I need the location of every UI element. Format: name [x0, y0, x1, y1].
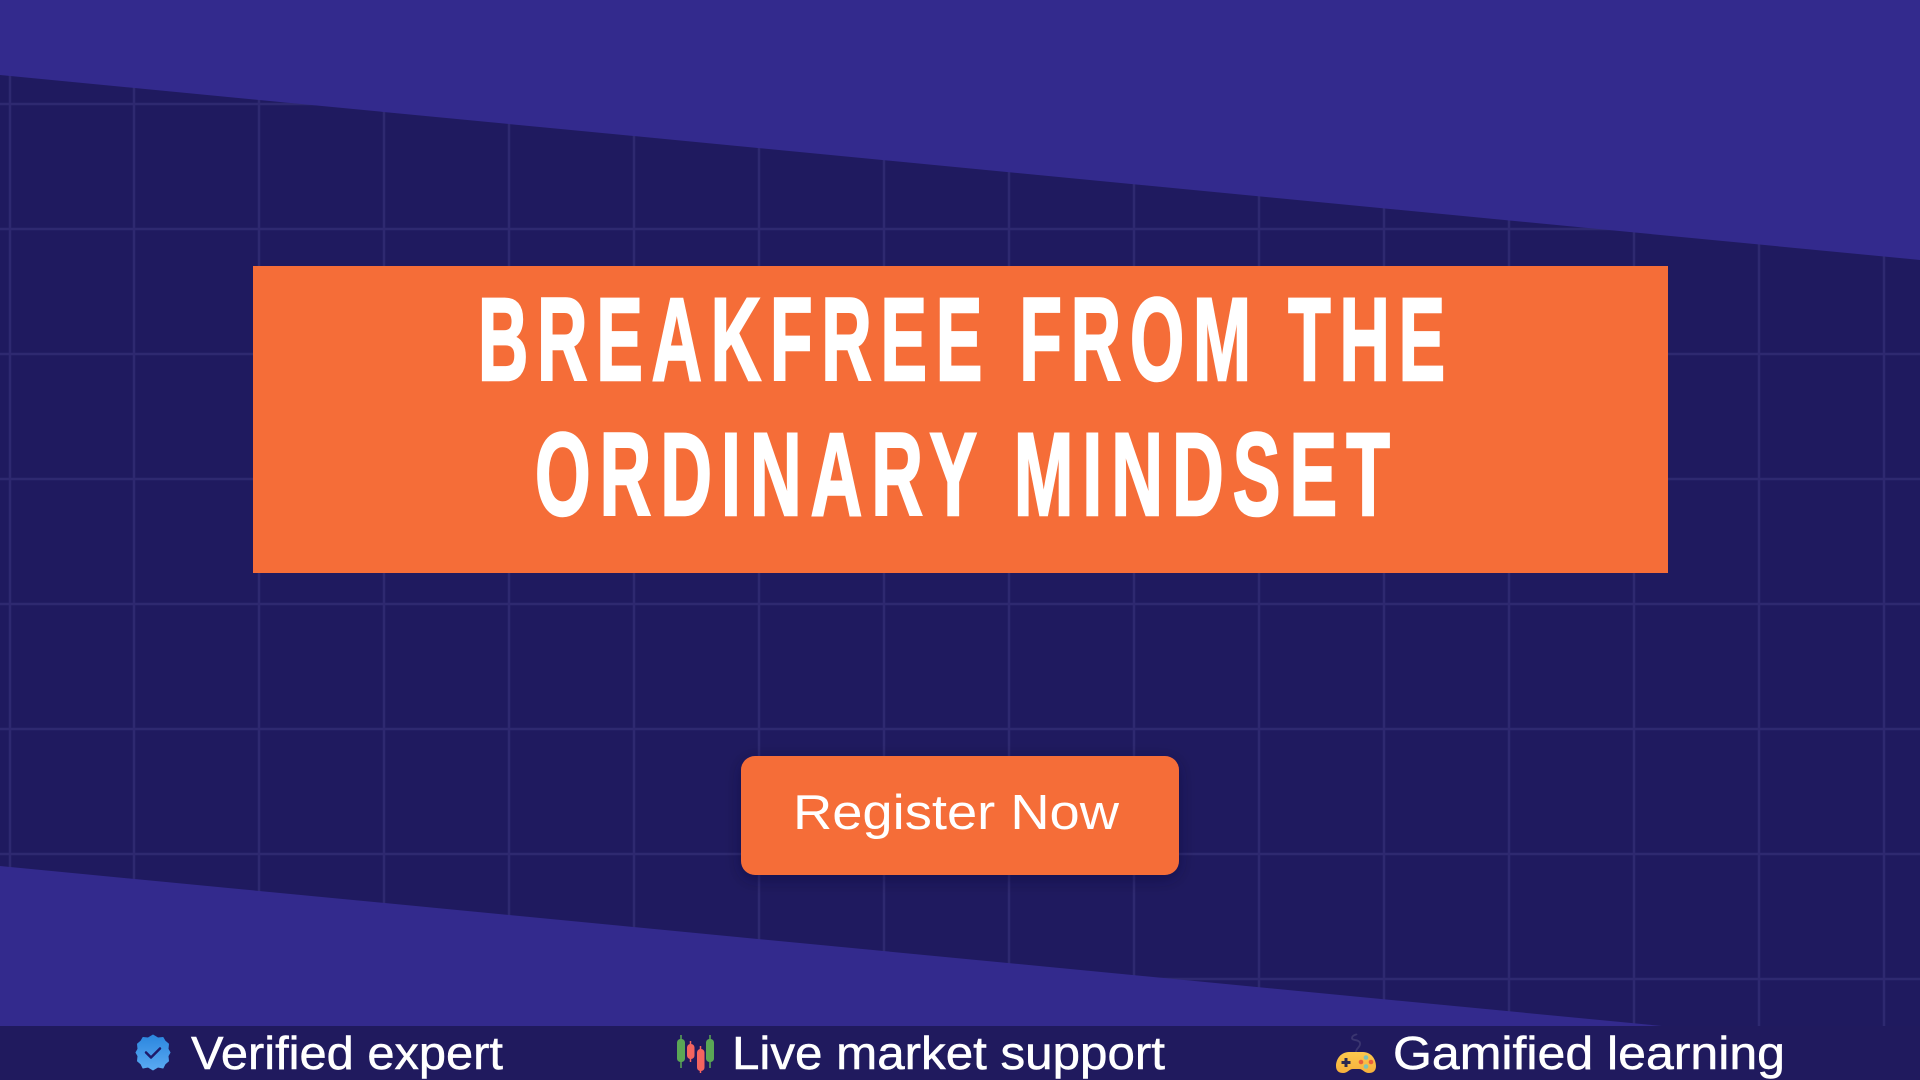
text: verified expert: Verified expert	[191, 1027, 503, 1079]
icon: verified badge	[136, 1035, 170, 1070]
register button	[741, 756, 1179, 875]
footer bar	[0, 1026, 1920, 1080]
icon: game controller	[1336, 1034, 1376, 1073]
text: gamified learning: Gamified learning	[1393, 1027, 1785, 1079]
text: live market support: Live market support	[732, 1027, 1165, 1079]
bottom diagonal band	[0, 866, 1662, 1026]
title banner	[253, 266, 1668, 573]
button label: Register Now	[793, 786, 1120, 840]
title line 2: ORDINARY MINDSET	[535, 409, 1399, 541]
icon: candlesticks	[677, 1035, 714, 1073]
top diagonal band	[0, 0, 1920, 260]
